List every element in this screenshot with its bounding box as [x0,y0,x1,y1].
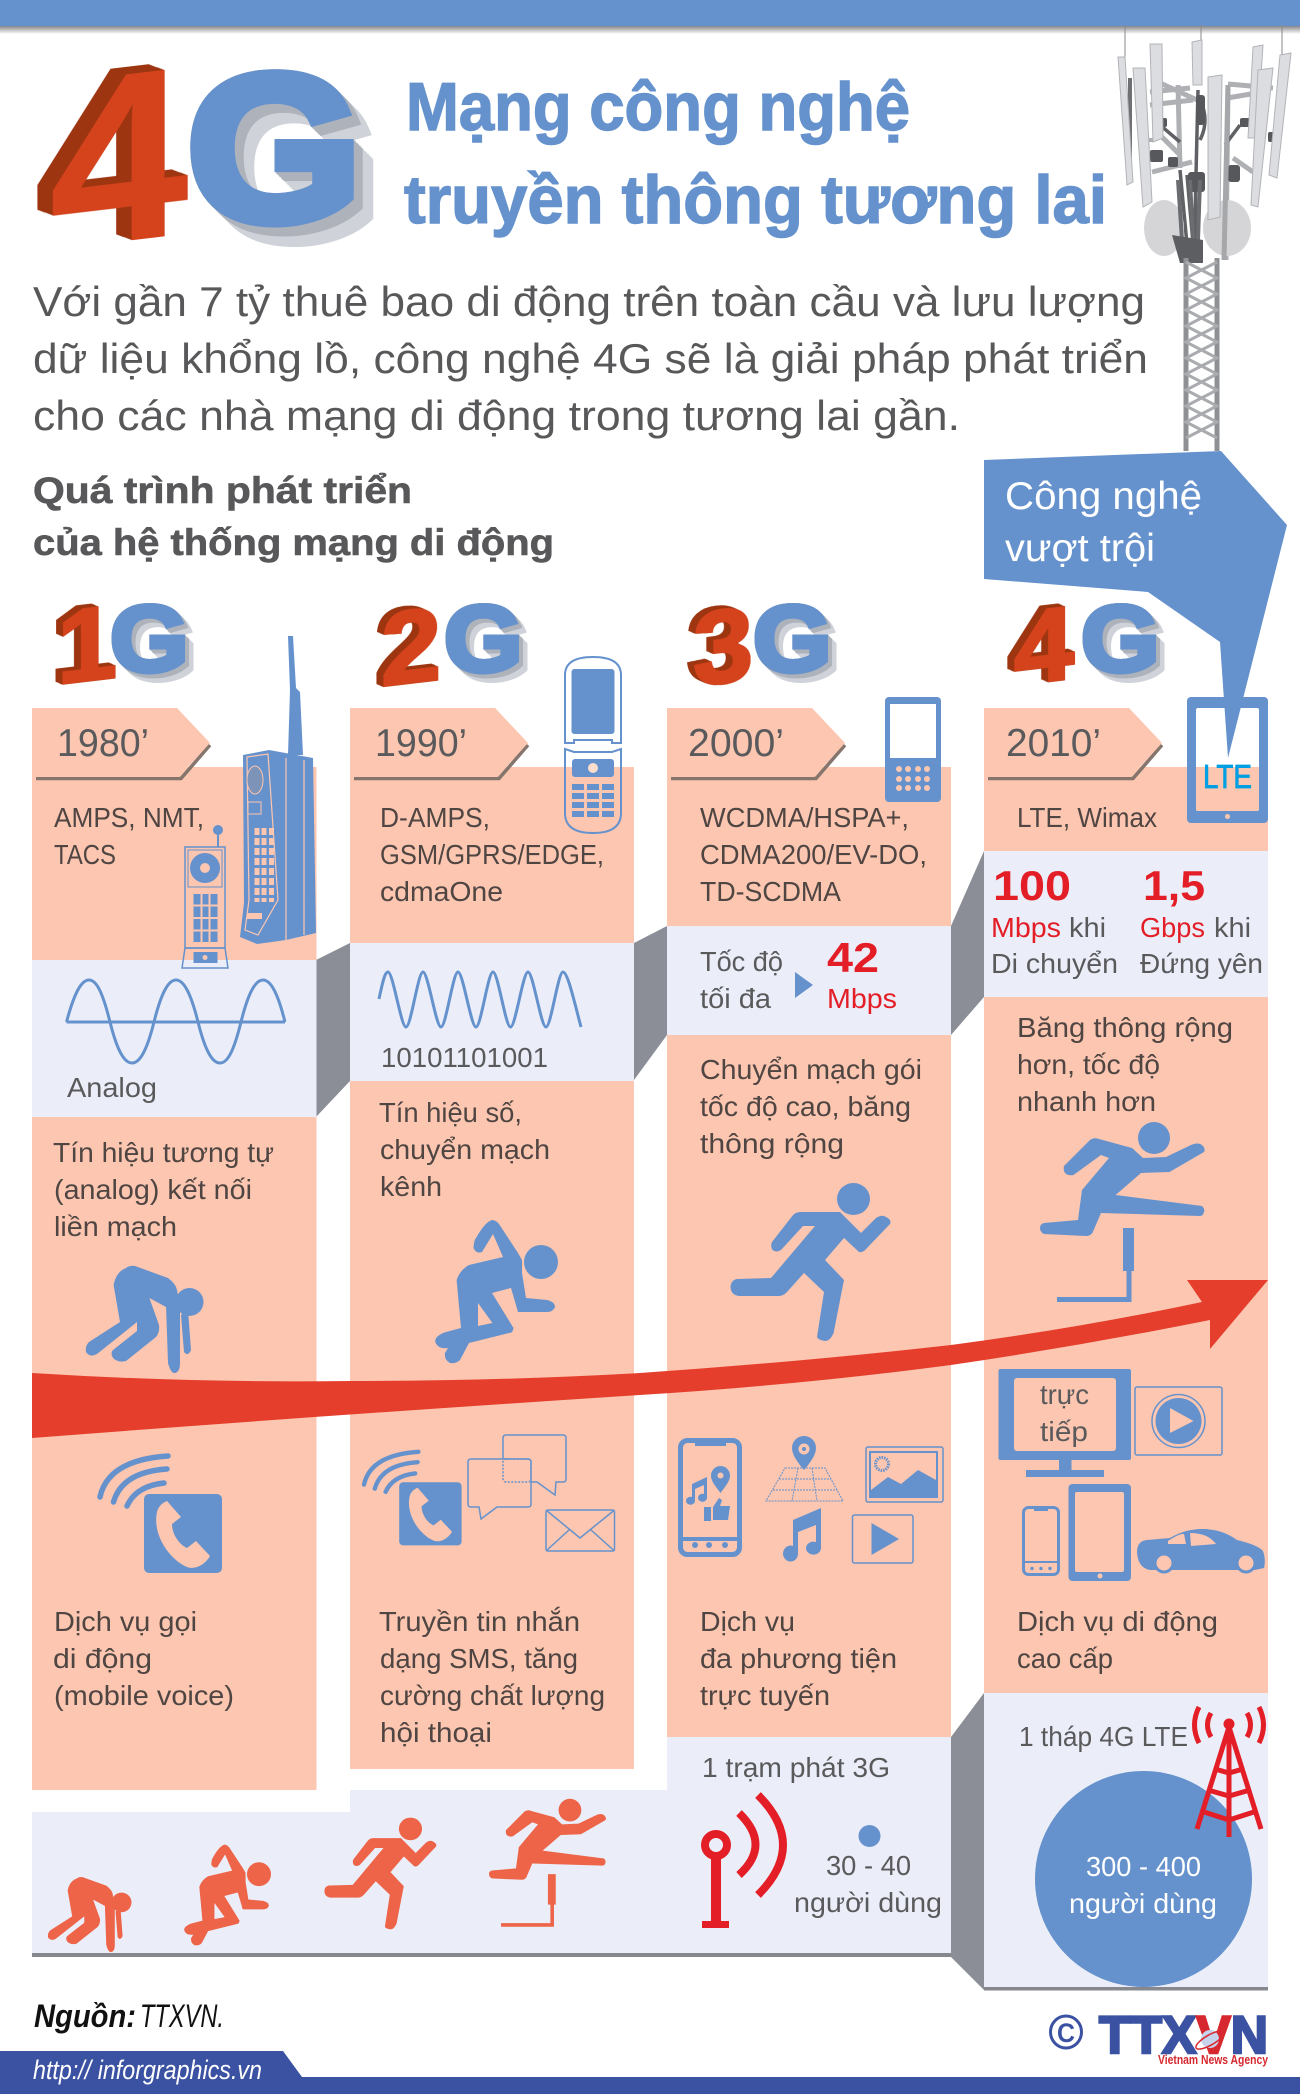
2G description: kênh [380,1171,442,1202]
panel: 4G column [984,697,1268,1990]
1G description: (analog) kết nối [54,1174,252,1205]
source: Nguồn: [34,1998,136,2034]
4G service: Dịch vụ di động [1017,1606,1218,1637]
3G standards: TD-SCDMA [700,876,841,907]
1G description: liền mạch [54,1211,177,1242]
4G tower label: 1 tháp 4G LTE [1019,1721,1188,1752]
section heading [33,470,554,563]
title [404,69,1107,238]
year tab 1990: 1990’ [375,722,467,765]
4G description: Băng thông rộng [1017,1012,1233,1043]
1G description: Tín hiệu tương tự [53,1137,274,1168]
tower illustration [1118,25,1291,451]
4G moving speed: khi [1069,912,1106,943]
3G speed: Tốc độ [700,946,783,977]
3G station label: 1 trạm phát 3G [702,1752,890,1783]
icon: multimedia set [680,1436,943,1563]
big 4G logo [49,15,362,302]
2G standards: cdmaOne [380,876,503,907]
icon: candybar phone [885,697,941,802]
4G standards: LTE, Wimax [1017,802,1157,833]
icon: LTE smartphone: LTE [1203,758,1252,795]
panel: 2G column [350,657,634,1769]
3G description: Chuyển mạch gói [700,1054,922,1085]
3G users: người dùng [794,1887,942,1918]
panel: 1G column [32,636,316,1790]
agency logo: TTXVN [1099,2006,1268,2065]
icon: starting figure [435,1220,558,1363]
generation logos: G [110,586,189,691]
year tab 2000: 2000’ [688,722,784,765]
year tab 1980: 1980’ [57,722,149,765]
3G service: Dịch vụ [700,1606,795,1637]
1G service: di động [53,1643,152,1674]
year tab 1990 [350,708,528,778]
1G description [53,1137,274,1242]
generation logos: 1 [57,583,117,706]
icon: LTE smartphone [1187,697,1268,823]
1G standards: AMPS, NMT, [54,802,204,833]
4G description: nhanh hơn [1017,1086,1156,1117]
footer band: http:// inforgraphics.vn [33,2055,262,2085]
year tab 2000 [667,708,845,778]
3G speed [700,934,897,1014]
1G standards [54,802,204,870]
bottom comparison band [32,1790,951,1957]
callout: superior technology [984,451,1287,758]
connectors between columns [316,851,984,1990]
3G speed: tối đa [700,983,771,1014]
1G service: Dịch vụ gọi [54,1606,197,1637]
3G standards: WCDMA/HSPA+, [700,802,909,833]
icon: live monitor: trực [1040,1379,1089,1410]
agency logo: C [1057,2018,1075,2048]
source: TTXVN. [140,1998,224,2034]
1G service [53,1606,234,1711]
1G service: (mobile voice) [54,1680,234,1711]
big 4G logo: G [187,32,362,264]
3G service [700,1606,897,1711]
generation logos: G [1081,586,1160,691]
title: truyền thông tương lai [404,162,1107,238]
4G description [1017,1012,1233,1117]
top bar [0,0,1300,34]
big 4G logo: 4 [49,15,189,302]
title: Mạng công nghệ [406,69,910,145]
label Analog: Analog [67,1072,157,1103]
icon: live monitor [998,1369,1131,1477]
panel: 3G column [667,697,951,1953]
4G description: hơn, tốc độ [1017,1049,1160,1080]
bottom runner figures [48,1799,606,1952]
generation logos: G [444,586,523,691]
3G description: tốc độ cao, băng [700,1091,911,1122]
icon: runner [730,1183,890,1341]
section heading: Quá trình phát triển [33,470,412,511]
intro paragraph: cho các nhà mạng di động trong tương lai gần. [33,392,960,439]
4G moving speed: Di chuyển [991,948,1118,979]
4G stationary speed: Gbps [1140,912,1205,943]
4G stationary speed [1140,862,1263,979]
icon: video player [1135,1387,1222,1455]
callout: superior technology: vượt trội [1005,527,1155,570]
icon: crouching figure [86,1266,204,1373]
2G standards: D-AMPS, [380,802,490,833]
4G users circle [1035,1771,1252,1987]
icon: flip phone [565,657,621,833]
2G service [379,1606,605,1748]
2G service: Truyền tin nhắn [379,1606,580,1637]
3G standards [700,802,927,907]
generation logos: 3 [693,585,753,708]
arrow: speed pointer [795,972,813,998]
icon: devices [1023,1484,1265,1581]
4G moving speed: 100 [993,862,1071,909]
intro paragraph: dữ liệu khổng lồ, công nghệ 4G sẽ là giải pháp phát triển [33,335,1148,382]
icon: 3G transmitter [702,1795,783,1928]
footer band [0,2051,1300,2094]
arrow: progress [32,1280,1268,1438]
4G stationary speed: khi [1214,912,1251,943]
intro paragraph [33,278,1148,439]
3G speed: Mbps [827,983,897,1014]
icon: hurdler [1040,1122,1205,1302]
4G stationary speed: Đứng yên [1140,948,1263,979]
2G standards: GSM/GPRS/EDGE, [380,839,604,870]
4G users circle: người dùng [1069,1888,1217,1919]
intro paragraph: Với gần 7 tỷ thuê bao di động trên toàn cầu và lưu lượng [33,278,1145,325]
3G users: 30 - 40 [826,1850,911,1881]
chart: analog wave [66,980,285,1063]
year tab 2010: 2010’ [1006,722,1101,765]
label binary: 10101101001 [381,1042,548,1073]
2G service: cường chất lượng [380,1680,605,1711]
4G service: cao cấp [1017,1643,1113,1674]
4G users circle: 300 - 400 [1086,1851,1201,1882]
3G speed: 42 [827,934,879,981]
year tab 1980 [32,708,210,778]
2G description: chuyển mạch [380,1134,550,1165]
generation logos: G [753,586,832,691]
1G standards: TACS [54,839,116,870]
4G service [1017,1606,1218,1674]
2G service: dạng SMS, tăng [380,1643,578,1674]
icon: 4G LTE tower [1194,1707,1264,1837]
year tab 2010 [984,708,1162,778]
3G service: trực tuyến [700,1680,830,1711]
agency logo: Vietnam News Agency [1158,2053,1268,2067]
icon: call, chat and mail [364,1435,614,1551]
icon: brick phone [240,636,316,944]
generation logos [57,583,1160,708]
icon: early phone [182,825,228,968]
3G standards: CDMA200/EV-DO, [700,839,927,870]
callout: superior technology: Công nghệ [1005,475,1202,518]
4G moving speed: Mbps [991,912,1061,943]
4G stationary speed: 1,5 [1143,862,1205,909]
generation logos: 4 [1014,584,1074,707]
3G service: đa phương tiện [700,1643,897,1674]
4G moving speed [991,862,1118,979]
2G description: Tín hiệu số, [379,1097,522,1128]
3G description: thông rộng [700,1128,844,1159]
2G service: hội thoại [380,1717,492,1748]
2G standards [380,802,604,907]
3G users [794,1825,942,1918]
source [34,1998,224,2034]
section heading: của hệ thống mạng di động [33,522,554,563]
icon: voice call [100,1456,222,1573]
generation logos: 2 [381,585,441,708]
icon: live monitor: tiếp [1040,1416,1088,1447]
3G description [700,1054,922,1159]
chart: digital wave [379,972,581,1027]
2G description [379,1097,550,1202]
